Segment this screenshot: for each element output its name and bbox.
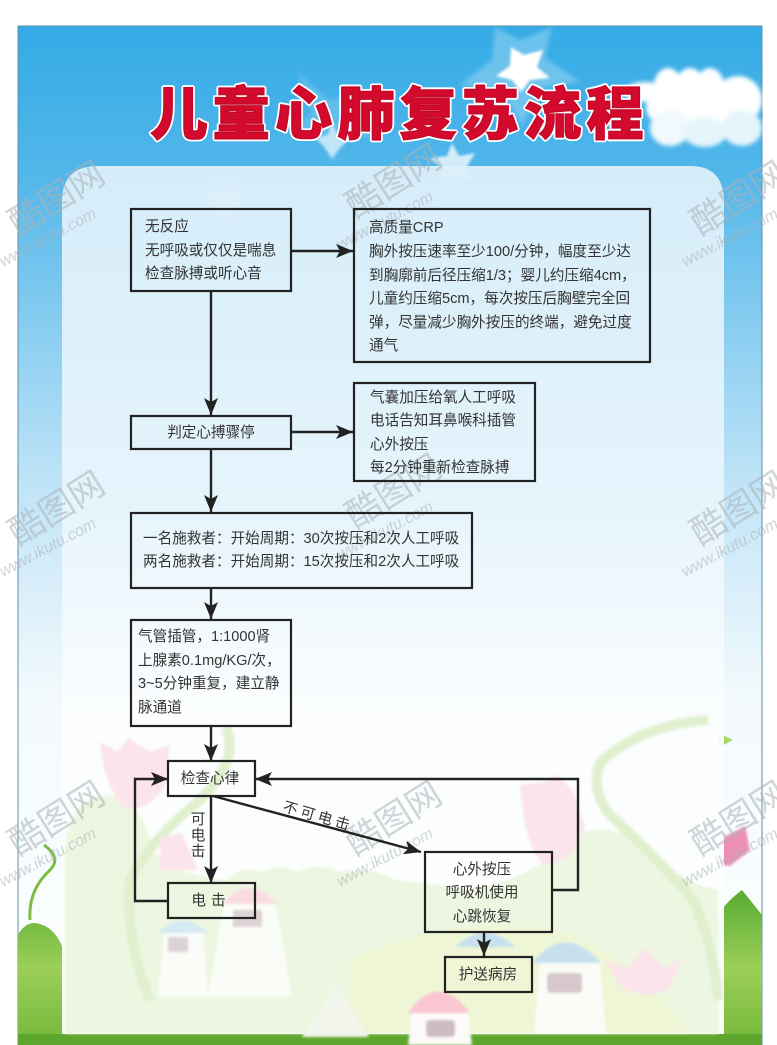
text: high quality CPR: 通气	[369, 337, 399, 354]
text: intubation: 上腺素0.1mg/KG/次，	[138, 652, 281, 669]
text: no response: 无呼吸或仅仅是喘息	[145, 242, 276, 259]
text: intubation	[138, 628, 281, 716]
text: intubation: 3~5分钟重复，建立静	[138, 674, 280, 692]
text: rescuers	[143, 530, 460, 570]
arrow: rhythm to compressions	[213, 796, 421, 852]
text: high quality CPR: 高质量CRP	[369, 219, 444, 236]
text: compressions: 心跳恢复	[453, 907, 512, 925]
box: no response	[131, 209, 291, 291]
label: shockable: 电	[191, 827, 206, 844]
arrow: rhythm to shock	[210, 796, 212, 883]
text: check rhythm: 检查心律	[181, 770, 239, 787]
arrow: no response to arrest	[210, 291, 212, 415]
box: compressions	[425, 852, 552, 932]
text: cardiac arrest: 判定心搏骤停	[167, 424, 255, 441]
text: compressions	[446, 861, 518, 925]
text: oxygen: 每2分钟重新检查脉搏	[370, 459, 509, 476]
icon: pink flower right	[718, 826, 750, 866]
arrow: shock back to rhythm	[135, 779, 168, 901]
icon: leaf	[718, 733, 733, 748]
text: rescuers: 两名施救者：开始周期：15次按压和2次人工呼吸	[143, 553, 460, 570]
translucent content panel	[62, 166, 724, 1034]
watermarks: 酷图网	[2, 154, 112, 243]
text: oxygen: 心外按压	[370, 436, 428, 453]
title: 儿童心肺复苏流程	[150, 83, 644, 147]
arrow: rescuers to intubation	[210, 588, 212, 619]
flowers	[100, 738, 170, 809]
arrow: compressions back to rhythm	[255, 779, 578, 890]
arrow: arrest to oxygen	[291, 431, 353, 433]
text: high quality CPR	[369, 219, 636, 354]
icon: stars	[204, 27, 580, 222]
label: not shockable: 不可电击	[281, 799, 355, 835]
text: rescuers: 一名施救者：开始周期：30次按压和2次人工呼吸	[143, 530, 460, 547]
arrows	[135, 251, 578, 956]
text: no response	[145, 217, 276, 282]
title: 儿童心肺复苏流程	[150, 83, 644, 147]
box: ward	[445, 957, 532, 992]
watermarks: www.ikutu.com	[334, 188, 436, 254]
text: compressions: 呼吸机使用	[446, 884, 518, 901]
text: high quality CPR: 儿童约压缩5cm，每次按压后胸壁完全回	[369, 289, 630, 307]
label: shockable: 击	[191, 843, 205, 860]
box: cardiac arrest	[131, 416, 291, 449]
text: no response: 检查脉搏或听心音	[145, 265, 262, 282]
mushroom houses	[208, 903, 292, 997]
ground: green hills	[18, 890, 762, 1045]
text: shock: 电击	[191, 892, 231, 909]
watermarks: 酷图网	[339, 774, 449, 863]
text: oxygen	[370, 389, 516, 476]
watermarks: 酷图网	[2, 774, 112, 863]
watermarks: 酷图网	[339, 447, 449, 536]
watermarks: 酷图网	[339, 137, 449, 226]
arrow: no response to CPR	[291, 250, 353, 252]
text: oxygen: 电话告知耳鼻喉科插管	[370, 412, 516, 429]
text: intubation: 脉通道	[138, 699, 182, 716]
text: no response: 无反应	[145, 217, 189, 235]
box: high quality CPR	[354, 209, 650, 362]
watermarks	[0, 136, 777, 891]
box: intubation	[131, 620, 291, 726]
text: oxygen: 气囊加压给氧人工呼吸	[370, 389, 516, 406]
text: high quality CPR: 胸外按压速率至少100/分钟，幅度至少达	[369, 243, 631, 260]
vine stems	[129, 727, 230, 1000]
box: rescuers	[131, 513, 472, 588]
watermarks: 酷图网	[2, 464, 112, 553]
flow text	[138, 217, 636, 983]
label: shockable: 可	[191, 812, 205, 828]
text: high quality CPR: 到胸廓前后径压缩1/3；婴儿约压缩4cm，	[369, 267, 636, 284]
icon: leaf sprig	[30, 845, 55, 920]
label: shockable	[191, 812, 206, 860]
text: ward: 护送病房	[459, 966, 517, 983]
watermarks: www.ikutu.com	[334, 825, 436, 891]
box: shock	[168, 883, 255, 918]
text: compressions: 心外按压	[453, 861, 511, 878]
text: high quality CPR: 弹，尽量减少胸外按压的终端，避免过度	[369, 314, 632, 331]
hills	[65, 795, 718, 1034]
garden illustration	[65, 720, 718, 1045]
arrow: compressions to ward	[483, 932, 485, 956]
watermarks: www.ikutu.com	[334, 498, 436, 564]
arrow: arrest to rescuers	[210, 449, 212, 512]
box: oxygen	[354, 383, 535, 481]
box: check rhythm	[168, 761, 255, 796]
arrow: intubation to rhythm	[210, 727, 212, 761]
text: intubation: 气管插管，1:1000肾	[138, 628, 270, 645]
icon: cloud	[625, 68, 762, 147]
